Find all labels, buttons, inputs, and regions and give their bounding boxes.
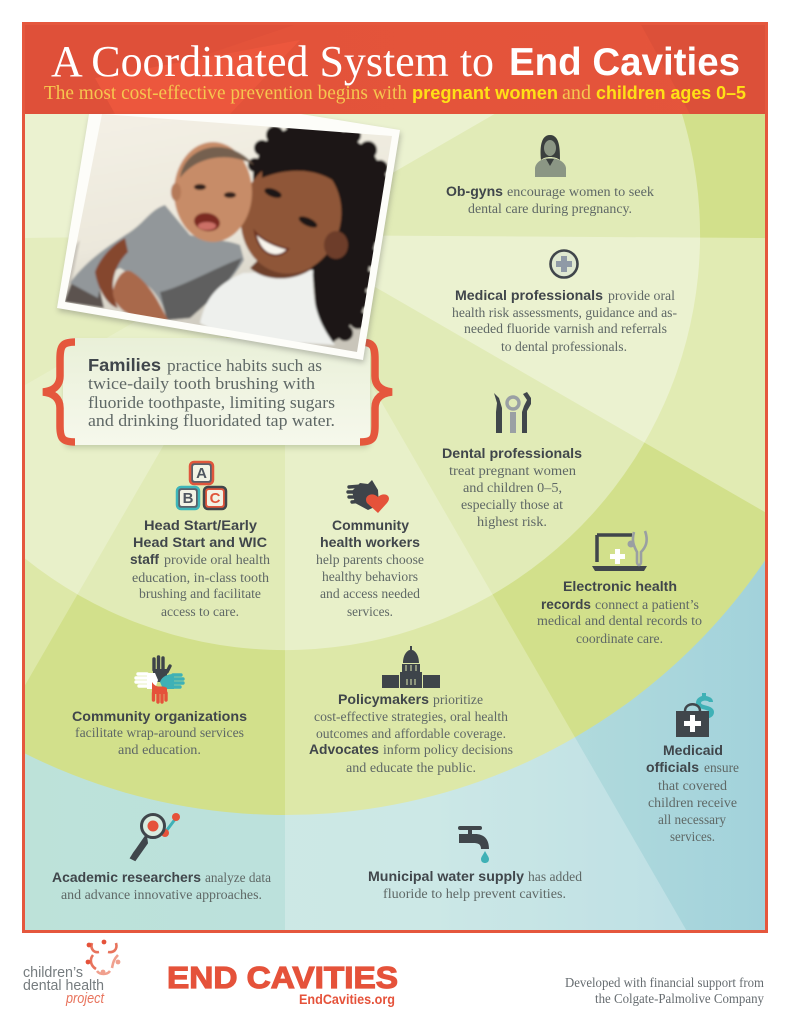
subtitle: The most cost-effective prevention begins with (44, 82, 407, 104)
text: head start: Head Start and WIC (133, 534, 267, 550)
text: head start: access to care. (161, 604, 239, 619)
text: academic researchers: and advance innovative approaches. (61, 887, 262, 902)
text: families: Families (88, 355, 161, 375)
text: community organizations: Community organizations (72, 708, 247, 724)
icon: electronic health records (592, 531, 647, 571)
subtitle: children ages 0–5 (596, 83, 746, 103)
subtitle: pregnant women (412, 83, 558, 103)
text: academic researchers: analyze data (205, 870, 271, 885)
text: head start: Head Start/Early (144, 517, 257, 533)
text: policymakers: outcomes and affordable coverage. (316, 726, 506, 741)
text: dental professionals: treat pregnant women (449, 463, 576, 478)
text: electronic health records: coordinate care. (576, 631, 663, 646)
icon: right brace (360, 342, 392, 442)
text: community health workers: Community (332, 517, 409, 533)
text: electronic health records: connect a patient’s (595, 597, 699, 612)
icon: ob-gyn doctor (535, 135, 566, 177)
photo: mother and baby (57, 106, 401, 363)
text: dental professionals: especially those at (461, 497, 563, 512)
icon: abc blocks: C (210, 490, 221, 507)
text: medicaid officials (646, 742, 739, 844)
text: community health workers: health workers (320, 534, 420, 550)
icon: dental tools (494, 392, 531, 433)
text: electronic health records: medical and dental records to (537, 613, 702, 628)
icon: medicaid briefcase (676, 693, 714, 737)
logo: end cavities: END CAVITIES (167, 960, 398, 995)
text: funding credit: the Colgate-Palmolive Company (595, 991, 764, 1006)
text: policymakers: Policymakers (338, 691, 429, 707)
logo: children's dental health project (23, 940, 120, 1007)
text: policymakers: cost-effective strategies, oral health (314, 709, 508, 724)
text: community health workers (316, 517, 424, 619)
text: municipal water supply: Municipal water supply (368, 868, 524, 884)
text: medical professionals (452, 287, 677, 354)
text: families: and drinking fluoridated tap water. (88, 411, 335, 430)
panel: background rings and wedges (25, 113, 766, 931)
text: electronic health records (537, 578, 702, 646)
text: dental professionals: Dental professionals (442, 445, 582, 461)
text: policymakers: Advocates (309, 741, 379, 757)
text: head start: provide oral health (164, 552, 270, 567)
icon: medical cross (550, 250, 578, 278)
text: community organizations: facilitate wrap-around services (75, 725, 244, 740)
text: electronic health records: Electronic health (563, 578, 677, 594)
text: community health workers: and access needed (320, 586, 420, 601)
text: medicaid officials: services. (670, 829, 715, 844)
text: medicaid officials: all necessary (658, 812, 726, 827)
text: medicaid officials: that covered (658, 778, 727, 793)
logo: children's dental health project: project (65, 990, 105, 1007)
text: community organizations (72, 708, 247, 757)
text: policymakers: prioritize (433, 692, 483, 707)
text: families (88, 355, 335, 430)
text: community health workers: services. (347, 604, 393, 619)
text: academic researchers: Academic researchers (52, 869, 201, 885)
text: municipal water supply (368, 868, 582, 901)
title (51, 37, 740, 86)
text: medical professionals: to dental professionals. (501, 339, 627, 354)
text: head start: staff (130, 551, 159, 567)
text: head start: education, in-class tooth (132, 570, 269, 585)
icon: abc blocks: A (196, 465, 207, 482)
text: policymakers: and educate the public. (346, 760, 476, 775)
text: funding credit: Developed with financial support from (565, 975, 764, 990)
icon: water tap (458, 826, 489, 863)
text: community organizations: and education. (118, 742, 201, 757)
text: electronic health records: records (541, 596, 591, 612)
text: medical professionals: Medical professionals (455, 287, 603, 303)
text: medical professionals: provide oral (608, 288, 675, 303)
text: academic researchers (52, 869, 271, 902)
title: A Coordinated System to (51, 37, 494, 86)
text: head start (130, 517, 270, 619)
text: medicaid officials: ensure (704, 760, 739, 775)
text: medical professionals: health risk assessments, guidance and as- (452, 305, 677, 320)
text: families: practice habits such as (167, 356, 322, 375)
logo: end cavities: EndCavities.org (299, 992, 395, 1007)
text: families: fluoride toothpaste, limiting sugars (88, 393, 335, 412)
icon: abc blocks (177, 462, 226, 509)
text: policymakers: inform policy decisions (383, 742, 513, 757)
header band (24, 23, 767, 114)
subtitle: and (562, 82, 591, 104)
text: community health workers: healthy behaviors (322, 569, 418, 584)
text: head start: brushing and facilitate (139, 586, 261, 601)
icon: hand with heart (348, 480, 389, 513)
subtitle (44, 82, 746, 104)
icon: abc blocks: B (183, 490, 194, 507)
logo: children's dental health project: children’s (23, 964, 83, 981)
text: medicaid officials: Medicaid (663, 742, 723, 758)
text: dental professionals: highest risk. (477, 514, 547, 529)
text: medical professionals: needed fluoride varnish and referrals (464, 321, 667, 336)
text: ob-gyns (446, 183, 654, 216)
text: ob-gyns: Ob-gyns (446, 183, 503, 199)
icon: four hands (136, 657, 183, 702)
text: policymakers (309, 691, 513, 775)
family callout box (43, 338, 392, 448)
text: municipal water supply: fluoride to help prevent cavities. (383, 886, 566, 901)
logo: end cavities (167, 960, 398, 1007)
text: community health workers: help parents choose (316, 552, 424, 567)
text: medicaid officials: officials (646, 759, 699, 775)
text: dental professionals (442, 445, 582, 529)
text: funding credit (565, 975, 764, 1006)
text: ob-gyns: encourage women to seek (507, 184, 654, 199)
text: families: twice-daily tooth brushing with (88, 374, 316, 393)
text: dental professionals: and children 0–5, (463, 480, 562, 495)
logo: children's dental health project: dental health (23, 977, 104, 994)
icon: capitol (382, 646, 440, 688)
icon: magnifier research (131, 813, 180, 860)
text: municipal water supply: has added (528, 869, 582, 884)
icon: left brace (43, 342, 75, 442)
title: End Cavities (509, 41, 740, 84)
text: medicaid officials: children receive (648, 795, 737, 810)
text: ob-gyns: dental care during pregnancy. (468, 201, 632, 216)
